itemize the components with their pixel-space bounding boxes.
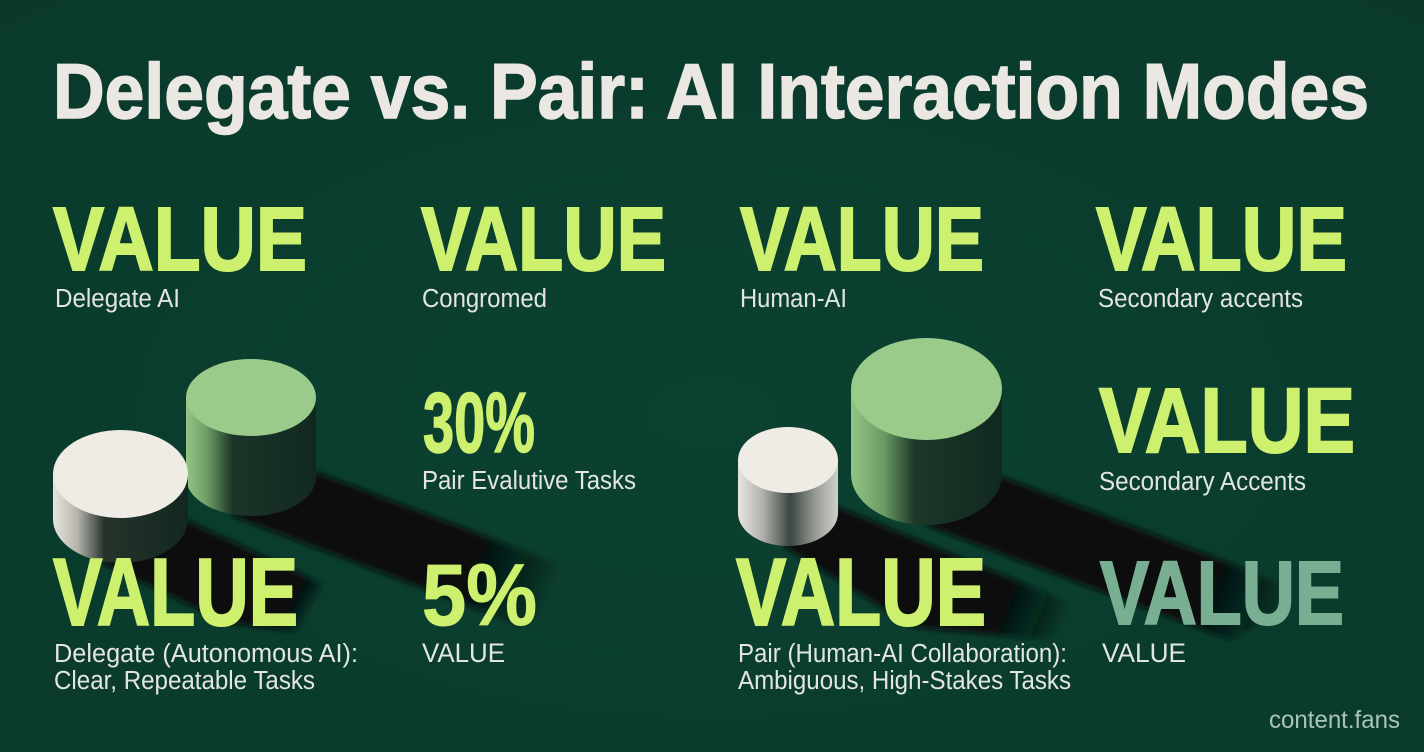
stat: muted value: VALUE <box>1100 544 1344 644</box>
cylinder: white <box>53 430 188 563</box>
stat: muted value: VALUE <box>1102 638 1186 668</box>
cylinder: green <box>851 338 1002 525</box>
stat: Human-AI: VALUE <box>740 190 984 290</box>
cylinder: green <box>186 359 316 516</box>
stat: Delegate AI: Delegate AI <box>55 285 180 313</box>
shadow: delegate cylinders <box>100 472 600 632</box>
stat: Pair tasks <box>736 539 1071 695</box>
stat: Secondary accents: VALUE <box>1096 190 1347 290</box>
stat: Human-AI: Human-AI <box>740 285 847 313</box>
stat: 5%: 5% <box>422 547 537 644</box>
stat: Delegate tasks: Clear, Repeatable Tasks <box>54 667 315 695</box>
stat: Pair tasks: Ambiguous, High-Stakes Tasks <box>738 667 1071 695</box>
stat: Secondary Accents: VALUE <box>1099 370 1355 472</box>
stat: Congromed <box>421 190 666 313</box>
chart: pair cylinders <box>738 338 1310 640</box>
cylinder: white <box>738 427 838 546</box>
chart: delegate cylinders <box>53 359 600 632</box>
stat: 30%: 30% <box>423 376 535 471</box>
stat: Pair tasks: VALUE <box>736 539 986 646</box>
stat: Secondary Accents: Secondary Accents <box>1099 468 1306 496</box>
stat: Delegate AI: VALUE <box>53 190 307 290</box>
stat: 30% <box>422 376 636 495</box>
stat: Delegate tasks: VALUE <box>53 539 298 646</box>
stat: Delegate tasks <box>53 539 358 695</box>
stat: 5%: VALUE <box>422 638 505 668</box>
stat: muted value <box>1100 544 1344 668</box>
stat: Congromed: Congromed <box>422 285 547 313</box>
stat: Pair tasks: Pair (Human-AI Collaboration): <box>738 640 1067 668</box>
stat: Secondary accents: Secondary accents <box>1098 285 1303 313</box>
stat: 30%: Pair Evalutive Tasks <box>422 467 636 495</box>
stat: Human-AI <box>740 190 984 313</box>
stat: Delegate tasks: Delegate (Autonomous AI): <box>54 640 358 668</box>
watermark: content.fans <box>1269 706 1400 734</box>
shadow: pair cylinders <box>783 477 1310 640</box>
stat: Congromed: VALUE <box>421 190 666 290</box>
